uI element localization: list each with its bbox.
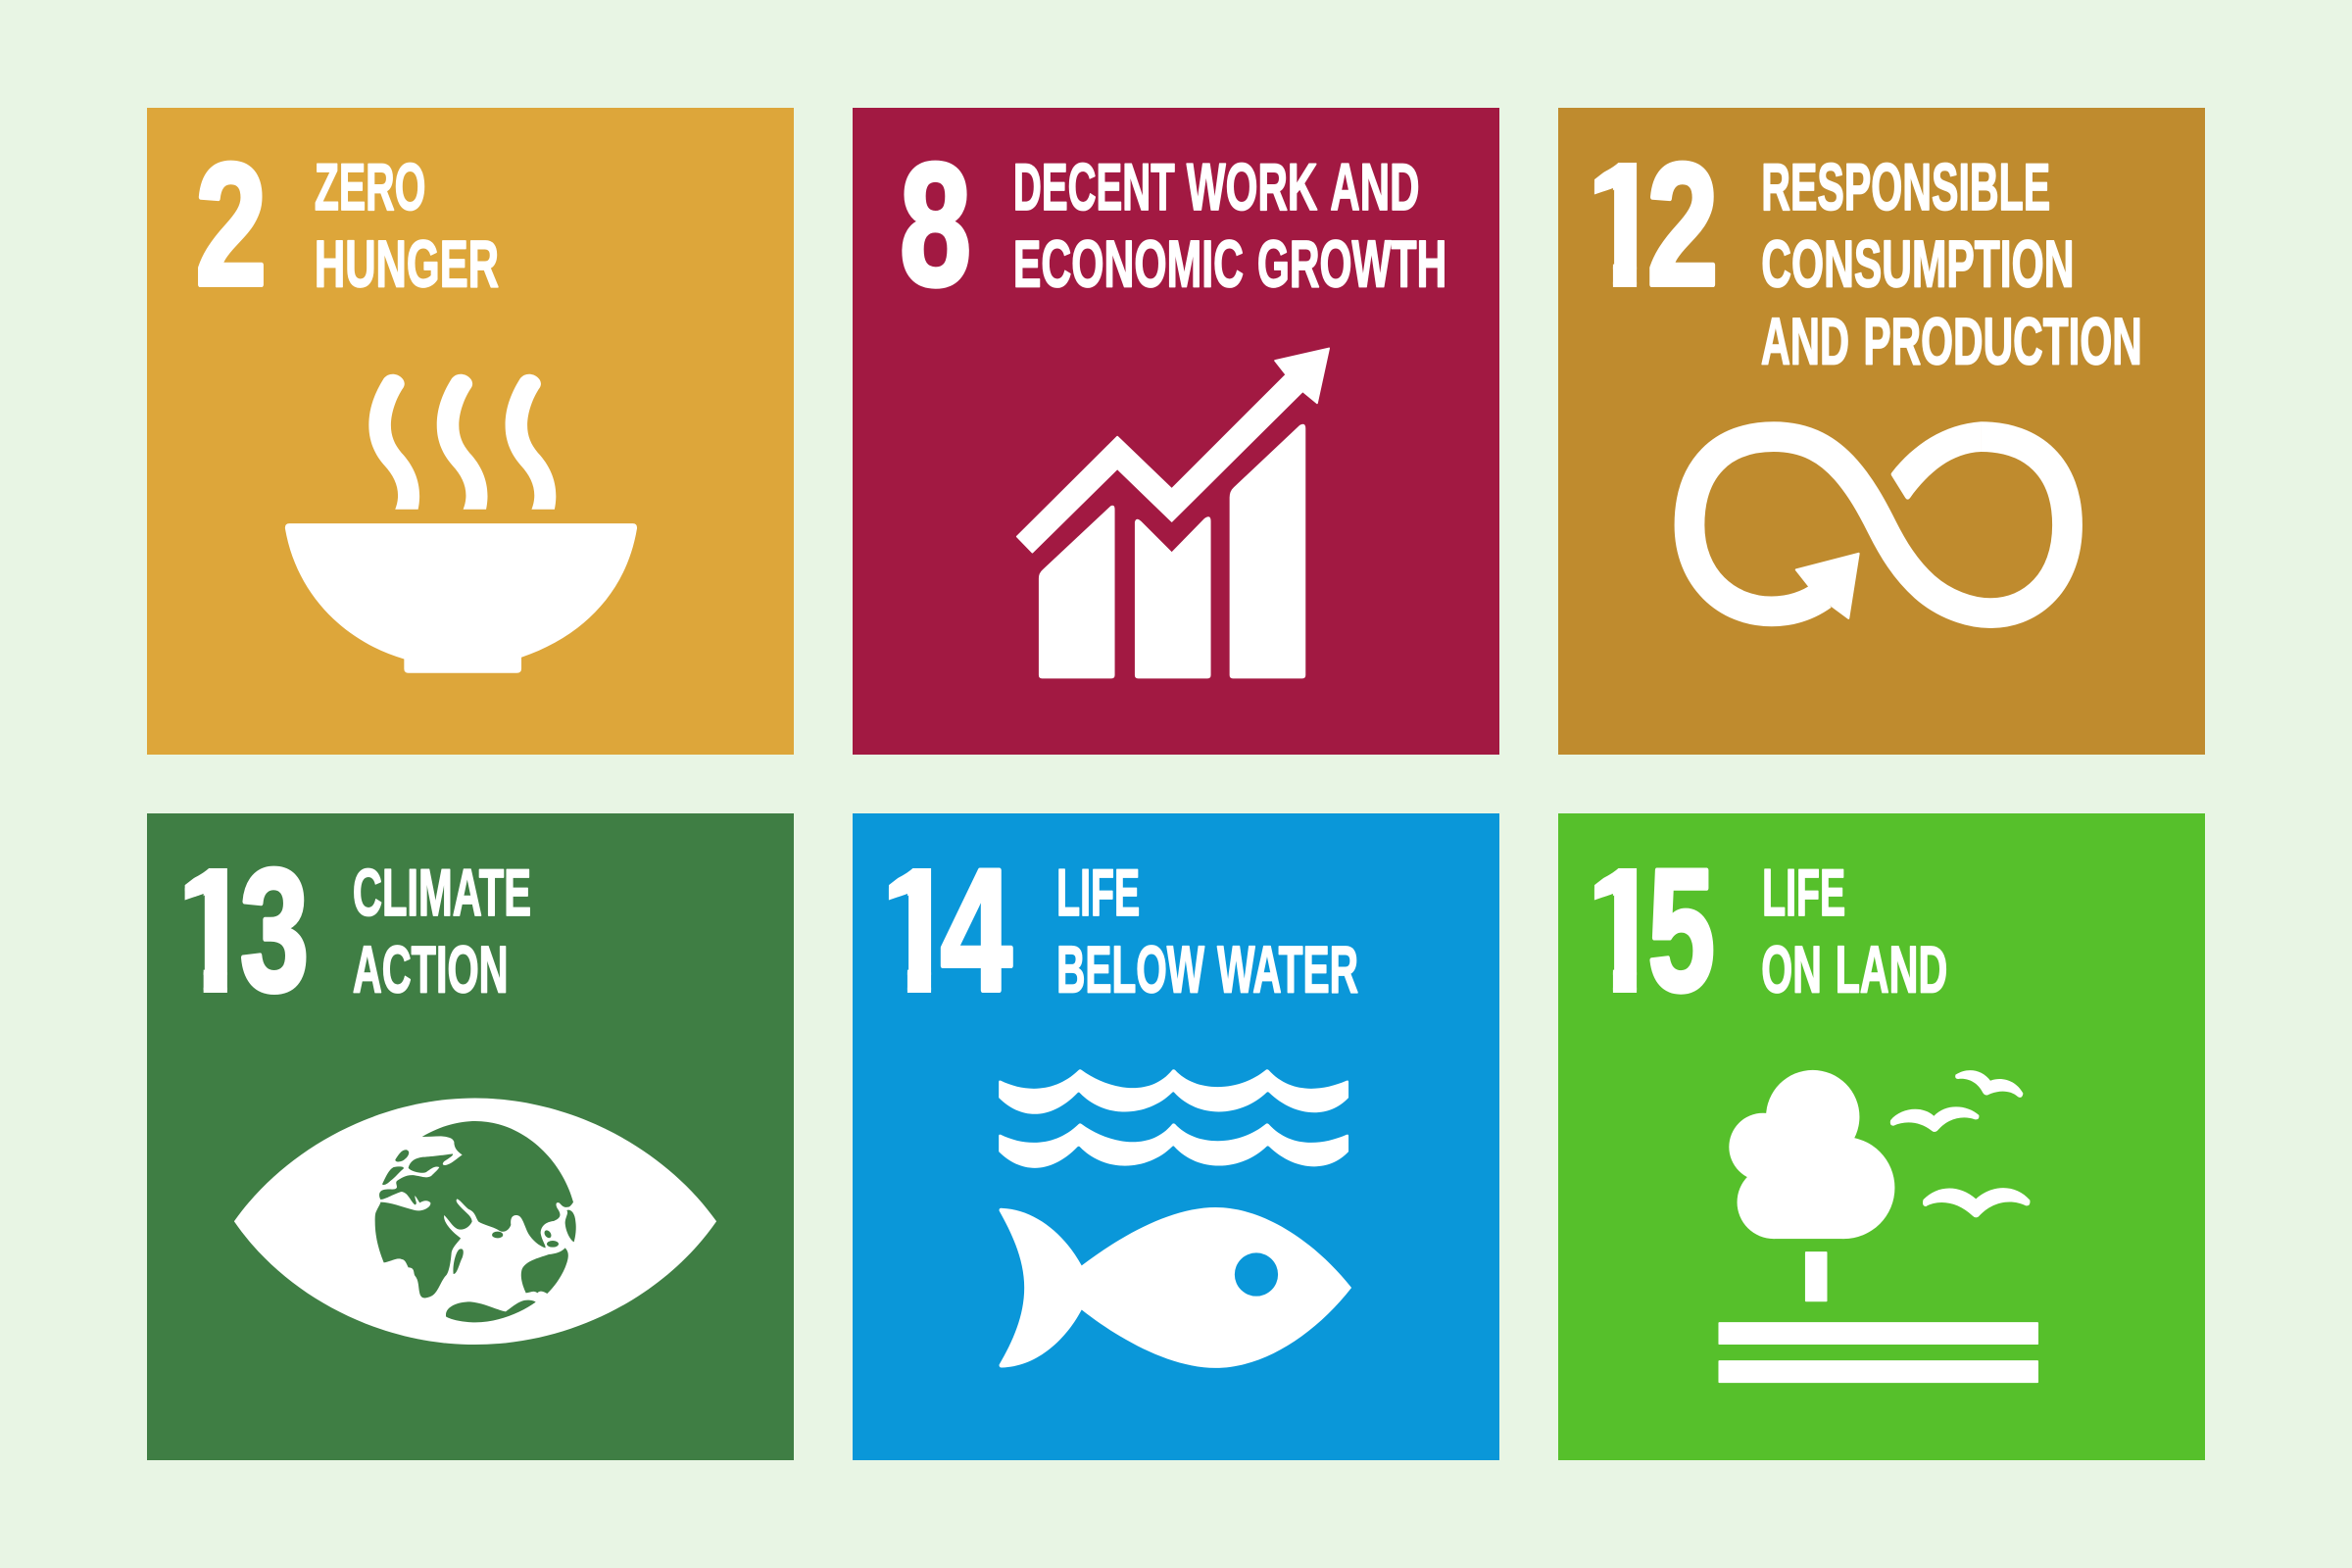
heading: life below water: LIFE <box>1056 856 1140 930</box>
heading: responsible consumption and production: RESPONSIBLE <box>1761 150 2050 224</box>
panel: goal 8 decent work and economic growth <box>853 108 1499 755</box>
icon: birds <box>1890 1070 2030 1217</box>
icon: steaming bowl <box>285 374 637 673</box>
panel: goal 12 responsible consumption and production <box>1558 108 2205 755</box>
heading: zero hunger <box>315 150 499 302</box>
heading: decent work and economic growth: ECONOMIC <box>1013 227 1244 302</box>
heading: decent work and economic growth: GROWTH <box>1257 227 1446 302</box>
heading: life below water: BELOW <box>1056 933 1204 1007</box>
panel: goal 13 climate action <box>147 813 794 1460</box>
number 14: 1 <box>877 832 957 1027</box>
icon: rising bar chart with arrow <box>1017 348 1329 678</box>
icon: fish <box>1000 1207 1351 1368</box>
number 2: 2 <box>195 126 267 321</box>
heading: life on land: ON <box>1761 933 1822 1007</box>
number 12: 1 <box>1583 126 1663 321</box>
heading: decent work and economic growth <box>1013 150 1446 302</box>
icon: eye shape <box>234 1099 716 1345</box>
panel: goal 2 zero hunger <box>147 108 794 755</box>
number 12: 2 <box>1647 126 1718 321</box>
heading: responsible consumption and production: CONSUMPTION <box>1761 227 2074 302</box>
heading: life on land: LAND <box>1836 933 1947 1007</box>
number 13: 1 <box>172 832 254 1027</box>
heading: life below water: WATER <box>1217 933 1358 1007</box>
heading: climate action: CLIMATE <box>353 856 531 930</box>
icon: tree <box>1729 1070 1894 1301</box>
heading: climate action: ACTION <box>353 933 509 1007</box>
number 13: 3 <box>240 832 309 1027</box>
number 13 <box>184 866 306 995</box>
infographic canvas <box>147 108 2205 1460</box>
heading: responsible consumption and production: PRODUCTION <box>1863 304 2142 378</box>
heading: life on land: LIFE <box>1762 856 1845 930</box>
number 14 <box>888 868 1013 993</box>
heading: responsible consumption and production <box>1761 150 2142 378</box>
number 12 <box>1593 161 1715 287</box>
panel: goal 14 life below water <box>853 813 1499 1460</box>
number 8: 8 <box>900 126 971 321</box>
number 15: 1 <box>1583 832 1663 1027</box>
heading: decent work and economic growth: DECENT <box>1013 150 1175 224</box>
panel: goal 15 life on land <box>1558 813 2205 1460</box>
heading: life on land <box>1761 856 1947 1007</box>
number 15: 5 <box>1647 832 1715 1027</box>
heading: climate action <box>353 856 531 1007</box>
heading: decent work and economic growth: AND <box>1330 150 1419 224</box>
heading: life below water <box>1056 856 1358 1007</box>
heading: zero hunger: HUNGER <box>315 227 499 302</box>
icon: infinity loop arrow <box>1690 421 2068 618</box>
number 15 <box>1593 868 1713 995</box>
icon: globe <box>375 1121 576 1322</box>
heading: responsible consumption and production: AND <box>1761 304 1849 378</box>
heading: zero hunger: ZERO <box>315 150 425 224</box>
icon: waves <box>999 1069 1348 1168</box>
number 14: 4 <box>941 832 1012 1027</box>
heading: decent work and economic growth: WORK <box>1187 150 1317 224</box>
icon: ground lines <box>1718 1322 2038 1383</box>
